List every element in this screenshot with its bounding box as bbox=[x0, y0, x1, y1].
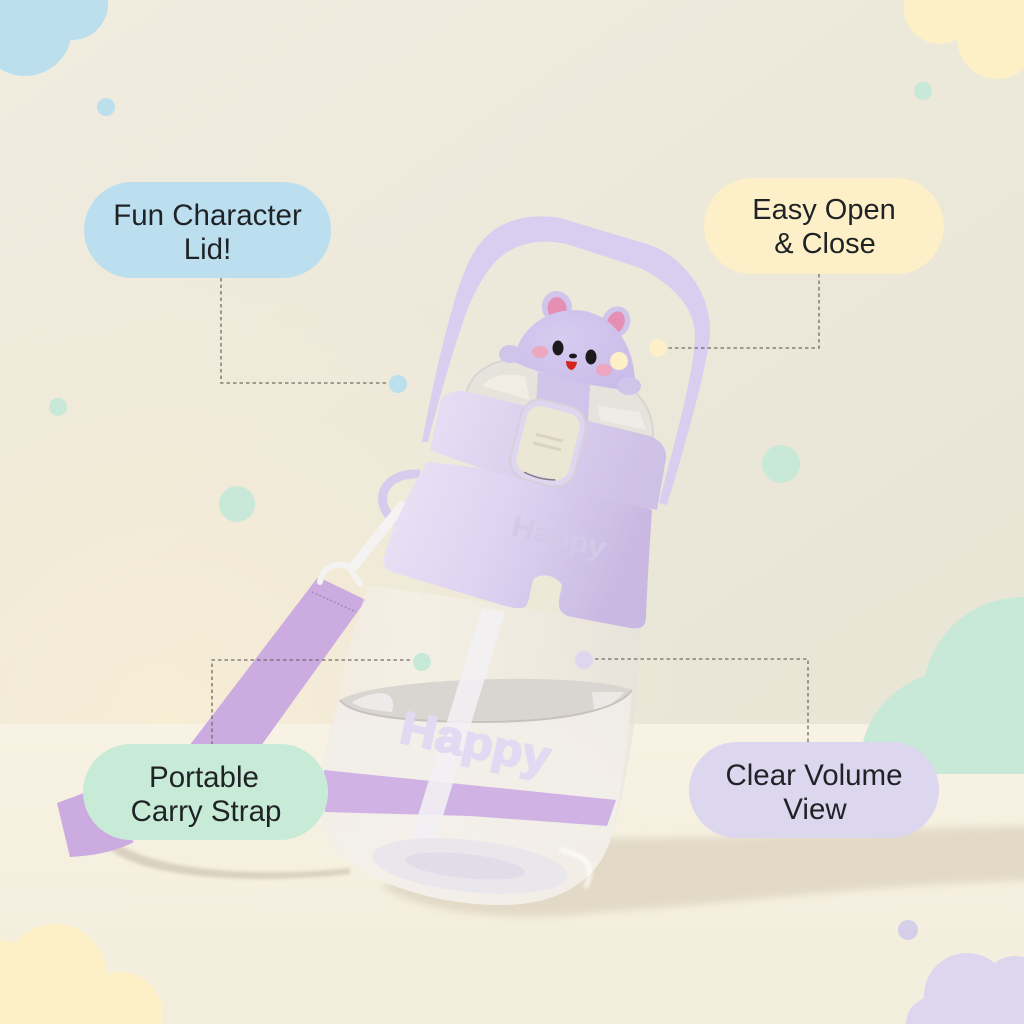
callout: easy open and close: Easy Open bbox=[752, 194, 896, 226]
callout: clear volume view: View bbox=[783, 793, 847, 826]
callout: fun character lid bbox=[84, 182, 407, 393]
callout: portable carry strap: Carry Strap bbox=[131, 795, 281, 828]
strap hook and cap ring bbox=[320, 474, 420, 584]
ears bbox=[540, 289, 574, 325]
callout: easy open and close: & Close bbox=[774, 228, 876, 260]
water surface bbox=[340, 679, 632, 722]
callout: portable carry strap: Portable bbox=[149, 761, 259, 794]
embossed text: Happy bbox=[508, 511, 609, 565]
bottle base bbox=[370, 830, 570, 902]
callout: fun character lid: Lid! bbox=[184, 233, 231, 266]
printed text: Happy bbox=[396, 701, 556, 783]
bottle shadow on table bbox=[110, 826, 1024, 916]
cloud: right mint bbox=[860, 597, 1024, 774]
eyes bbox=[552, 340, 564, 356]
background wall bbox=[0, 0, 1024, 726]
callout: clear volume view bbox=[575, 651, 939, 838]
cloud: top right yellow bbox=[904, 0, 1024, 79]
callout: clear volume view: Clear Volume bbox=[725, 759, 903, 792]
handle bbox=[422, 216, 710, 505]
bottle body bbox=[320, 585, 640, 905]
callout: portable carry strap bbox=[83, 653, 431, 840]
water bbox=[320, 679, 632, 905]
cloud: bottom right lavender bbox=[906, 953, 1024, 1024]
straw bbox=[408, 608, 505, 852]
cheeks bbox=[532, 346, 548, 358]
character lid bbox=[499, 289, 641, 422]
lower cap bbox=[383, 462, 652, 628]
nose bbox=[569, 354, 577, 358]
cloud: bottom left yellow bbox=[0, 924, 162, 1024]
callout: easy open and close bbox=[610, 178, 944, 370]
mouth bbox=[566, 361, 577, 370]
head bbox=[514, 310, 635, 391]
lid band bbox=[430, 391, 666, 510]
neck strip bbox=[536, 372, 590, 422]
carry strap bbox=[57, 577, 366, 857]
clear dome lid bbox=[467, 360, 653, 438]
cloud: top left blue bbox=[0, 0, 108, 76]
push button bbox=[506, 395, 590, 491]
callout: fun character lid: Fun Character bbox=[113, 199, 302, 232]
decorative dots bbox=[49, 82, 932, 940]
arms bbox=[499, 345, 521, 363]
table surface bbox=[0, 724, 1024, 1024]
rear strap through bottle bbox=[324, 770, 616, 826]
